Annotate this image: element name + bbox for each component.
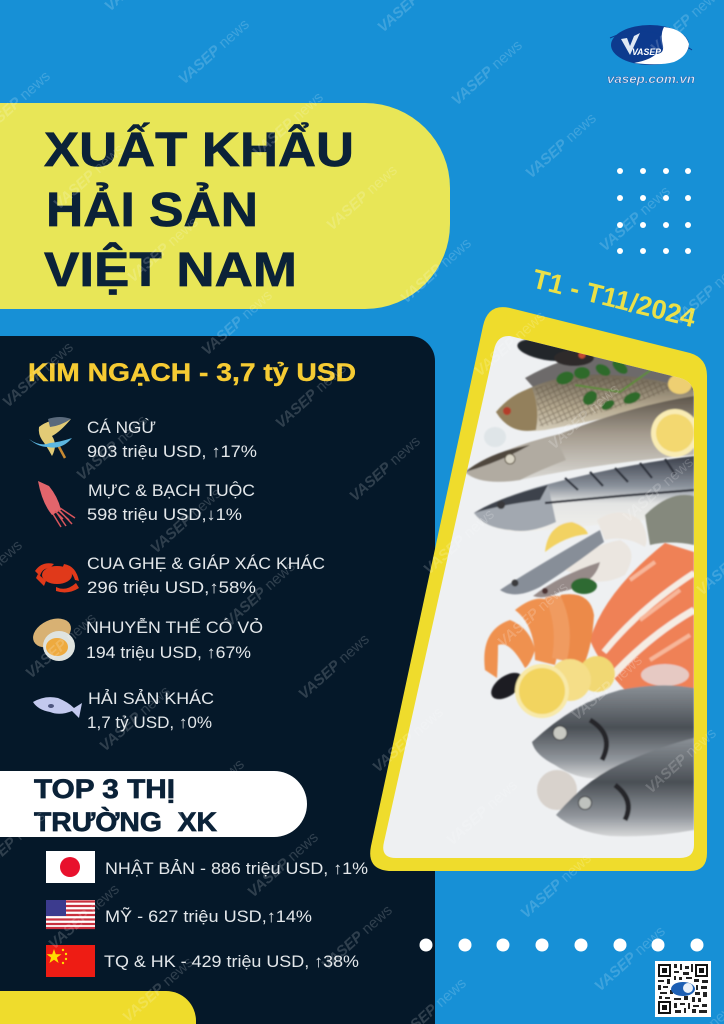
title: XUẤT KHẨU	[44, 123, 354, 177]
watermark: VASEP news	[471, 308, 549, 380]
watermark: VASEP news	[198, 287, 276, 359]
value: 194 triệu USD, ↑67%	[86, 643, 251, 662]
watermark: VASEP news	[517, 850, 595, 922]
watermark: VASEP news	[522, 110, 600, 182]
heading: top 3 markets	[0, 771, 307, 837]
watermark: VASEP news	[397, 235, 475, 307]
logo: VASEP: VASEP	[632, 47, 662, 57]
market: China and Hong Kong	[46, 945, 359, 977]
sea bream lower	[556, 738, 694, 836]
label: CUA GHẸ & GIÁP XÁC KHÁC	[87, 554, 325, 573]
panel: dark content	[0, 336, 435, 1024]
watermark: VASEP news	[596, 183, 674, 255]
mussel	[490, 672, 522, 700]
photo: seafood	[370, 330, 700, 865]
label: CÁ NGỪ	[87, 418, 156, 437]
herb	[571, 578, 597, 594]
watermark: VASEP news	[568, 652, 646, 724]
photo frame	[370, 307, 707, 871]
watermark: VASEP news	[221, 558, 299, 630]
mussel and dark fish	[516, 340, 694, 391]
watermark: VASEP news	[443, 777, 521, 849]
flag: China	[46, 945, 95, 977]
watermark: VASEP news	[420, 506, 498, 578]
flag: USA	[46, 900, 95, 929]
dot row	[420, 938, 704, 952]
watermark: VASEP news	[591, 923, 669, 995]
label: NHUYỄN THỂ CÓ VỎ	[86, 618, 263, 637]
item: tuna	[29, 417, 257, 461]
label: HẢI SẢN KHÁC	[88, 689, 214, 708]
watermark: VASEP news	[323, 162, 401, 234]
heading: top 3 markets: TOP 3 THỊ	[34, 774, 175, 804]
watermark: VASEP news	[494, 579, 572, 651]
value: 598 triệu USD,↓1%	[87, 505, 242, 524]
dot grid	[617, 168, 691, 254]
logo caption: vasep.com.vn	[607, 72, 695, 86]
market: Japan	[46, 851, 368, 883]
watermark: VASEP news	[73, 412, 151, 484]
watermark: VASEP news	[45, 881, 123, 953]
title banner	[0, 103, 450, 309]
icon: tuna	[29, 417, 72, 458]
watermark: VASEP news	[545, 381, 623, 453]
watermark: VASEP news	[124, 214, 202, 286]
item: shellfish	[28, 613, 263, 662]
watermark: VASEP news	[642, 725, 720, 797]
QR code	[655, 961, 711, 1017]
item: crab	[35, 554, 325, 597]
squid	[565, 512, 647, 582]
market: USA	[46, 900, 312, 929]
QR centre logo	[671, 982, 695, 996]
value: 1,7 tỷ USD, ↑0%	[87, 713, 212, 732]
icon: crab	[35, 563, 79, 592]
watermark: VASEP news	[272, 360, 350, 432]
watermark: VASEP news	[50, 141, 128, 213]
watermark: VASEP news	[448, 37, 526, 109]
shrimp	[484, 594, 594, 678]
sardines	[500, 530, 604, 597]
heading: export value: KIM NGẠCH - 3,7 tỷ USD	[28, 359, 356, 387]
logo: VASEP	[607, 25, 695, 86]
fish behind	[645, 495, 694, 545]
flag: Japan	[46, 851, 95, 883]
watermark: VASEP news	[346, 433, 424, 505]
watermark: VASEP news	[119, 954, 197, 1024]
icon: squid	[38, 481, 75, 527]
heading: top 3 markets: TRƯỜNG XK	[34, 806, 218, 837]
text: MỸ - 627 triệu USD,↑14%	[105, 907, 312, 926]
title: VIỆT NAM	[44, 242, 297, 297]
carp	[496, 374, 694, 431]
watermark: VASEP news	[244, 829, 322, 901]
icon: clam	[28, 613, 76, 661]
item: squid	[38, 481, 255, 527]
mackerel	[474, 456, 694, 532]
item: other seafood	[33, 689, 214, 732]
ice cube	[484, 427, 506, 447]
watermark: VASEP news	[170, 756, 248, 828]
value: 903 triệu USD, ↑17%	[87, 442, 257, 461]
herbs	[556, 362, 652, 411]
watermark: VASEP news	[0, 339, 77, 411]
small lemon	[545, 522, 588, 552]
octopus	[537, 770, 577, 810]
watermark: VASEP news	[96, 683, 174, 755]
value: 296 triệu USD,↑58%	[87, 578, 256, 597]
watermark: VASEP news	[619, 454, 697, 526]
bottom yellow tab	[0, 991, 196, 1024]
title: HẢI SẢN	[46, 182, 258, 237]
title	[44, 123, 354, 297]
label: MỰC & BẠCH TUỘC	[88, 481, 255, 500]
text: NHẬT BẢN - 886 triệu USD, ↑1%	[105, 859, 368, 878]
watermark: VASEP news	[295, 631, 373, 703]
pike	[465, 396, 694, 482]
watermark: VASEP news	[369, 704, 447, 776]
watermark: VASEP news	[318, 902, 396, 974]
watermark: VASEP news	[22, 610, 100, 682]
icon: fish	[33, 697, 82, 718]
watermark: VASEP news	[249, 89, 327, 161]
lemons	[515, 656, 615, 718]
sea bream upper	[532, 685, 694, 779]
watermark: VASEP news	[175, 16, 253, 88]
date label: T1 - T11/2024	[530, 264, 699, 333]
lemon	[651, 409, 699, 457]
watermark: VASEP news	[147, 485, 225, 557]
salmon	[590, 543, 694, 690]
text: TQ & HK - 429 triệu USD, ↑38%	[104, 952, 359, 971]
